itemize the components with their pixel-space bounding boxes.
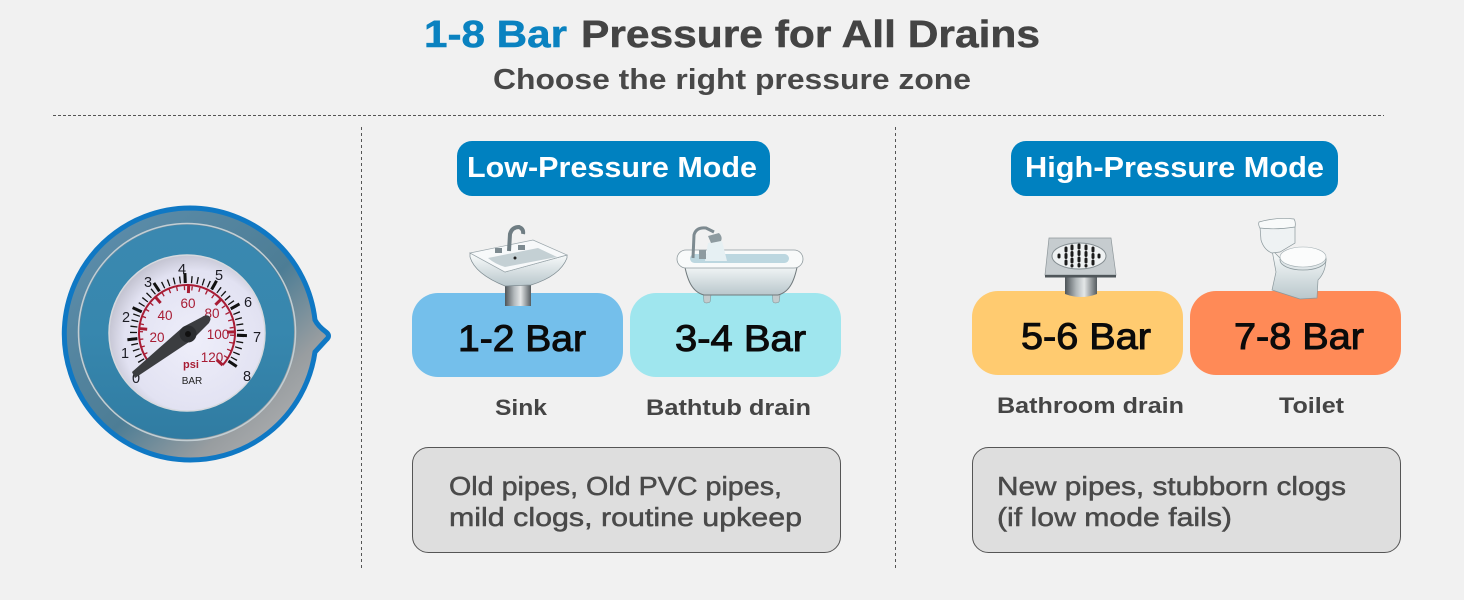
bar numerals: 8 [243, 369, 251, 385]
psi numerals [149, 296, 229, 371]
psi numerals: 100 [207, 327, 229, 342]
psi scale ticks [139, 285, 235, 365]
high-pressure use cases: (if low mode fails) [997, 502, 1232, 532]
bar numerals: 0 [132, 371, 140, 387]
low-pressure mode pill [457, 141, 770, 196]
5-6 bar card [972, 291, 1183, 375]
gauge dial [109, 255, 265, 411]
title: 1-8 Bar [424, 14, 567, 56]
bar numerals: 4 [178, 262, 186, 278]
7-8 bar card: 7-8 Bar [1234, 316, 1364, 357]
title: Pressure for All Drains [581, 14, 1040, 56]
high-pressure mode pill: High-Pressure Mode [1025, 152, 1324, 184]
icon: bathtub [677, 228, 803, 303]
subtitle: Choose the right pressure zone [493, 64, 971, 96]
5-6 bar card: 5-6 Bar [1021, 316, 1151, 357]
drain holes [1059, 245, 1099, 266]
toilet label: Toilet [1279, 393, 1345, 418]
3-4 bar card [630, 293, 841, 377]
high-pressure mode pill [1011, 141, 1338, 196]
psi numerals: 20 [149, 330, 165, 345]
bathtub drain label: Bathtub drain [646, 395, 811, 420]
high-pressure use cases: New pipes, stubborn clogs [997, 471, 1346, 501]
1-2 bar card [412, 293, 623, 377]
gauge housing [64, 208, 329, 460]
icon: sink [470, 227, 567, 306]
psi numerals: 40 [157, 308, 173, 323]
bar numerals [121, 262, 261, 387]
bathroom drain label: Bathroom drain [997, 393, 1184, 418]
pressure gauge [64, 208, 329, 460]
bar numerals: 7 [253, 330, 261, 346]
low-pressure use cases [412, 448, 840, 552]
high-pressure use cases [972, 448, 1400, 552]
bar numerals: 3 [144, 275, 152, 291]
psi numerals: psi [183, 359, 199, 371]
1-2 bar card: 1-2 Bar [458, 318, 586, 359]
bar numerals: 5 [215, 268, 223, 284]
icon: toilet [1259, 218, 1326, 299]
icon: floor drain [1045, 238, 1116, 297]
bar scale ticks [127, 273, 247, 370]
psi numerals: 80 [204, 306, 220, 321]
7-8 bar card [1190, 291, 1401, 375]
low-pressure use cases: Old pipes, Old PVC pipes, [449, 471, 782, 501]
needle [132, 315, 210, 378]
psi numerals: 60 [180, 296, 196, 311]
psi numerals: 120 [201, 350, 223, 365]
bar numerals: 2 [122, 310, 130, 326]
bar numerals: 1 [121, 346, 129, 362]
low-pressure use cases: mild clogs, routine upkeep [449, 502, 802, 532]
BAR label: BAR [182, 376, 202, 387]
low-pressure mode pill: Low-Pressure Mode [467, 152, 757, 184]
gauge teal ring [80, 225, 294, 439]
3-4 bar card: 3-4 Bar [675, 318, 806, 359]
title [424, 14, 1040, 56]
bar numerals: 6 [244, 295, 252, 311]
sink label: Sink [495, 395, 548, 420]
